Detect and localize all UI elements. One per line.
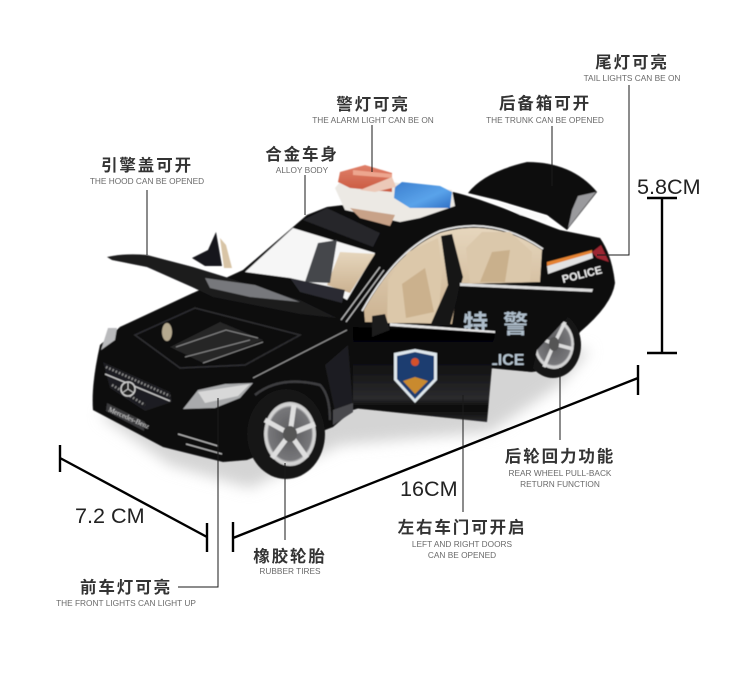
label: tail: TAIL LIGHTS CAN BE ON [584,73,680,83]
dimension labels: 16CM [400,476,458,501]
label: alloy [265,144,339,175]
label: rear wheel: 后轮回力功能 [505,447,615,466]
left headlight [101,328,117,350]
rear wheel [525,312,581,378]
label: doors: CAN BE OPENED [428,550,496,560]
front wheel [247,389,325,479]
rear door [453,283,593,372]
police badge [394,349,437,403]
label: doors [398,517,526,560]
label: hood: 引擎盖可开 [101,155,193,175]
side skirt [333,403,353,425]
label: trunk: 后备箱可开 [499,93,591,113]
open hood [107,254,337,318]
light bar [335,165,455,226]
headlight [183,383,253,409]
label: alarm: 警灯可亮 [336,94,410,114]
label: headlights [56,577,196,608]
windshield [245,228,375,300]
label: trunk: THE TRUNK CAN BE OPENED [486,115,604,125]
dimension: length [233,365,638,552]
cabin interior [364,228,542,324]
label: headlights: 前车灯可亮 [80,577,172,597]
bumper vents [178,434,222,454]
label: alarm: THE ALARM LIGHT CAN BE ON [312,115,434,125]
label: tires: 橡胶轮胎 [253,546,327,566]
seat rear [466,232,532,282]
label: alloy: 合金车身 [265,144,339,164]
label: trunk [486,93,604,125]
label: hood: THE HOOD CAN BE OPENED [90,176,204,186]
roof window band [303,208,380,247]
label: tail [584,52,680,83]
engine cover [170,322,263,363]
rear door: LICE [488,352,525,369]
text: plate: Mercedes-Benz [107,406,151,431]
star badge [121,382,135,396]
A pillar chrome [341,267,384,322]
car shadow [100,330,590,488]
dimension: height [647,198,677,353]
dimension lines [60,198,677,552]
plate [106,403,145,431]
label: headlights: THE FRONT LIGHTS CAN LIGHT UP [56,598,196,608]
door arch chrome [362,226,543,311]
label: alarm [312,94,434,125]
label: doors: LEFT AND RIGHT DOORS [412,539,513,549]
label: rear wheel: RETURN FUNCTION [520,479,600,489]
leader lines [147,85,629,587]
grille [103,362,172,411]
dimension labels: 7.2 CM [75,503,145,528]
label: hood [90,155,204,186]
dimension labels: 5.8CM [637,174,701,199]
engine bay [117,293,347,380]
label: rear wheel: REAR WHEEL PULL-BACK [509,468,612,478]
fender highlight [253,330,347,378]
door handle [372,314,390,337]
label: tires [253,546,327,576]
dimension labels [75,174,701,528]
seat front [387,238,442,323]
front door [353,314,495,422]
dimension: width [60,445,207,552]
B pillar [430,234,463,326]
label: rear wheel [505,447,615,489]
oil cap [162,323,172,341]
tail light [592,245,609,262]
trunk lid [468,162,597,230]
label: tires: RUBBER TIRES [259,566,321,576]
police car [93,162,615,479]
rear stripe [547,252,593,274]
side mirror [192,232,222,266]
label: tail: 尾灯可亮 [595,52,669,72]
front seat through windshield [327,252,375,293]
rear body [93,192,615,462]
label: doors: 左右车门可开启 [398,517,526,537]
text: POLICE rear: POLICE [561,264,603,286]
label: alloy: ALLOY BODY [276,165,329,175]
door text: 特 警 [463,311,532,339]
